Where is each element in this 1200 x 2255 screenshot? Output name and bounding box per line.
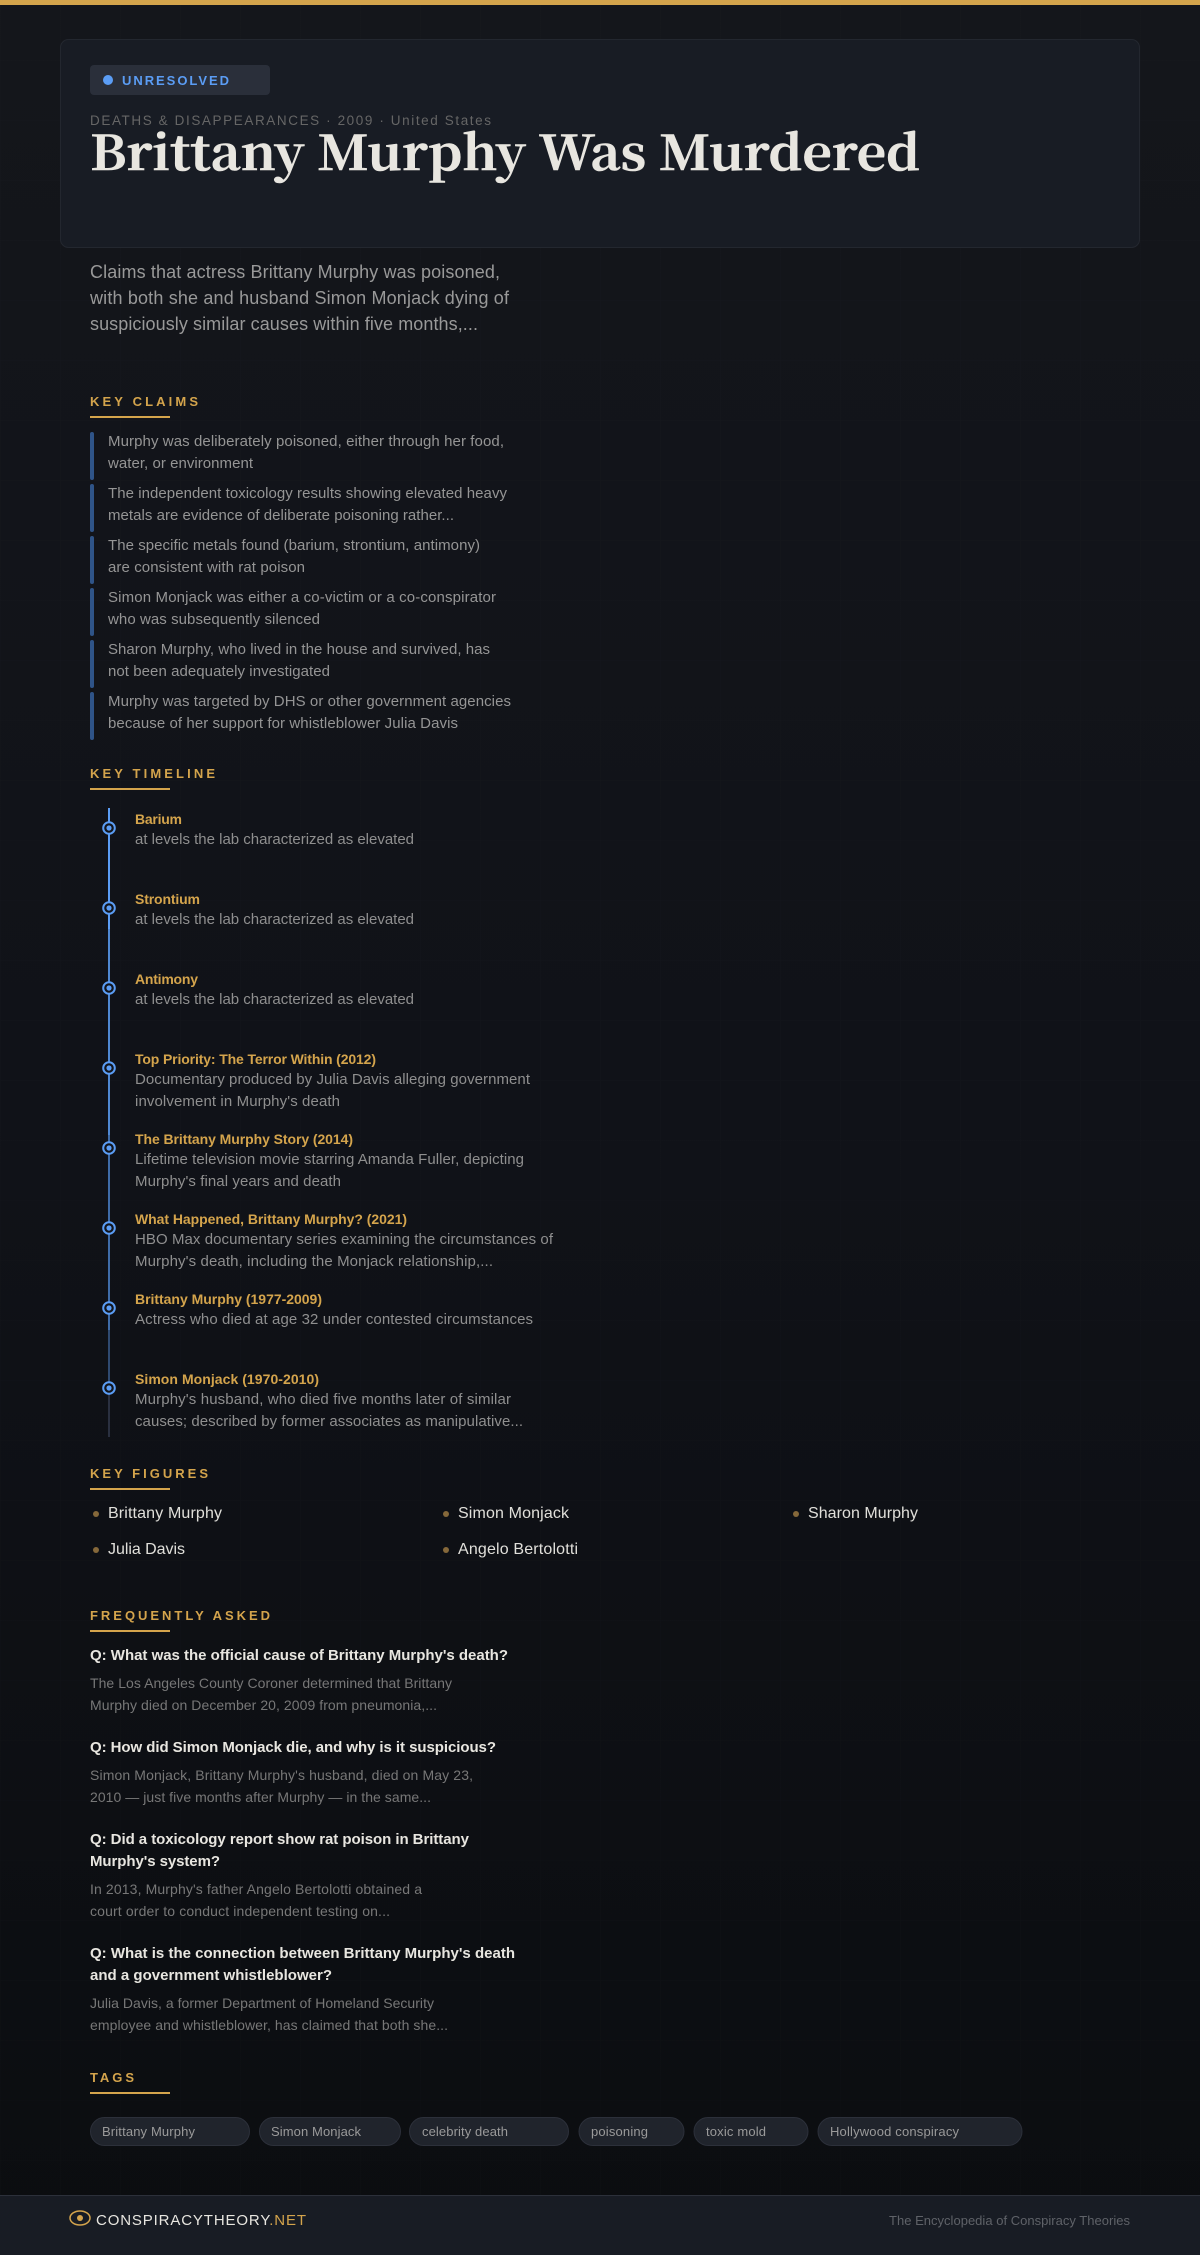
claim 1	[90, 432, 504, 480]
claim 3: The specific metals found (barium, strontium, antimony)	[108, 537, 480, 554]
tag: celebrity death	[410, 2118, 568, 2146]
claim 3	[90, 536, 480, 584]
question 4	[90, 1945, 515, 2033]
summary text	[89, 262, 510, 334]
tag: poisoning: poisoning	[591, 2124, 648, 2139]
question 1: Murphy died on December 20, 2009 from pneumonia,...	[90, 1697, 437, 1713]
question 2: Q: How did Simon Monjack die, and why is it suspicious?	[90, 1739, 496, 1756]
figure: Brittany Murphy: Brittany Murphy	[108, 1505, 222, 1522]
figure: Simon Monjack: Simon Monjack	[458, 1505, 570, 1522]
tag: Simon Monjack: Simon Monjack	[271, 2124, 362, 2139]
tag: Hollywood conspiracy	[818, 2118, 1022, 2146]
claim 1: Murphy was deliberately poisoned, either through her food,	[108, 433, 504, 450]
panel: key claims list	[90, 432, 511, 740]
claim 3: are consistent with rat poison	[108, 559, 305, 576]
tag: celebrity death: celebrity death	[422, 2124, 508, 2139]
event: Strontium: at levels the lab characterized as elevated	[135, 911, 414, 928]
event: Top Priority: Documentary produced by Julia Davis alleging government	[135, 1071, 531, 1088]
tag: Brittany Murphy	[90, 2118, 250, 2146]
heading: key timeline: KEY TIMELINE	[90, 766, 215, 781]
event: Brittany Murphy: Brittany Murphy (1977-2009)	[135, 1291, 322, 1307]
title: Brittany Murphy Was Murdered	[90, 115, 920, 184]
tag: toxic mold	[694, 2118, 808, 2146]
heading: key timeline	[90, 766, 215, 790]
claim 6	[90, 692, 511, 740]
event: The Brittany Murphy Story: Lifetime television movie starring Amanda Fuller, depicting	[135, 1151, 524, 1168]
question 3: Murphy's system?	[90, 1853, 220, 1870]
question 1: The Los Angeles County Coroner determined that Brittany	[90, 1675, 452, 1691]
event: Barium: Barium	[135, 811, 182, 827]
heading: tags	[90, 2070, 170, 2094]
tag: Hollywood conspiracy: Hollywood conspiracy	[830, 2124, 960, 2139]
question 3	[90, 1831, 470, 1919]
question 4: Q: What is the connection between Brittany Murphy's death	[90, 1945, 515, 1962]
claim 2: The independent toxicology results showing elevated heavy	[108, 485, 508, 502]
claim 2	[90, 484, 508, 532]
tag: Brittany Murphy: Brittany Murphy	[102, 2124, 196, 2139]
claim 4	[90, 588, 496, 636]
event: Strontium: Strontium	[135, 891, 200, 907]
event: Brittany Murphy	[103, 1291, 533, 1328]
event: The Brittany Murphy Story: The Brittany Murphy Story (2014)	[135, 1131, 353, 1147]
panel: key figures list	[93, 1505, 918, 1558]
heading: key claims	[90, 394, 198, 418]
category, year and location: DEATHS & DISAPPEARANCES · 2009 · United States	[90, 113, 491, 128]
figure: Angelo Bertolotti: Angelo Bertolotti	[458, 1541, 578, 1558]
summary text: suspiciously similar causes within five months,...	[90, 314, 478, 334]
event: What Happened, Brittany Murphy?: HBO Max documentary series examining the circumstances of	[135, 1231, 554, 1248]
summary text: with both she and husband Simon Monjack dying of	[89, 288, 510, 308]
event: Antimony: Antimony	[135, 971, 198, 987]
question 2	[90, 1739, 496, 1805]
badge: unresolved status: UNRESOLVED	[122, 73, 229, 88]
event: Top Priority: Top Priority: The Terror Within (2012)	[135, 1051, 376, 1067]
icon: eye logo	[70, 2211, 90, 2225]
event: Strontium	[103, 891, 414, 928]
chart: key timeline	[103, 808, 554, 1437]
claim 6: Murphy was targeted by DHS or other government agencies	[108, 693, 511, 710]
claim 2: metals are evidence of deliberate poisoning rather...	[108, 507, 454, 524]
event: Barium	[103, 811, 414, 848]
timeline spine	[108, 808, 110, 1437]
tag: poisoning	[579, 2118, 684, 2146]
claim 4: Simon Monjack was either a co-victim or a co-conspirator	[108, 589, 496, 606]
question 1: Q: What was the official cause of Brittany Murphy's death?	[90, 1647, 508, 1664]
question 4: and a government whistleblower?	[90, 1967, 332, 1984]
heading: tags: TAGS	[90, 2070, 134, 2085]
figure: Julia Davis: Julia Davis	[108, 1541, 185, 1558]
footer tagline: The Encyclopedia of Conspiracy Theories	[889, 2213, 1130, 2228]
panel: frequently asked questions	[90, 1647, 515, 2033]
event: Top Priority: involvement in Murphy's death	[135, 1093, 340, 1110]
claim 1: water, or environment	[107, 455, 254, 472]
summary text: Claims that actress Brittany Murphy was poisoned,	[90, 262, 500, 282]
claim 5: not been adequately investigated	[108, 663, 330, 680]
question 1	[90, 1647, 508, 1713]
event: What Happened, Brittany Murphy?: What Happened, Brittany Murphy? (2021)	[135, 1211, 407, 1227]
event: Simon Monjack: Simon Monjack (1970-2010)	[135, 1371, 319, 1387]
badge: unresolved status	[90, 65, 270, 95]
event: What Happened, Brittany Murphy?: Murphy's death, including the Monjack relationship,...	[135, 1253, 493, 1270]
panel: tags	[90, 2118, 1022, 2146]
wordmark: CONSPIRACYTHEORY.NET	[96, 2212, 306, 2229]
question 3: In 2013, Murphy's father Angelo Bertolotti obtained a	[90, 1881, 422, 1897]
heading: key figures: KEY FIGURES	[90, 1466, 208, 1481]
tag: toxic mold: toxic mold	[706, 2124, 766, 2139]
figure: Sharon Murphy: Sharon Murphy	[808, 1505, 918, 1522]
event: What Happened, Brittany Murphy?	[103, 1211, 554, 1270]
tag: Simon Monjack	[260, 2118, 400, 2146]
heading: frequently asked: FREQUENTLY ASKED	[90, 1608, 270, 1623]
event: Brittany Murphy: Actress who died at age 32 under contested circumstances	[135, 1311, 533, 1328]
question 4: employee and whistleblower, has claimed that both she...	[90, 2017, 448, 2033]
event: Simon Monjack: causes; described by former associates as manipulative...	[135, 1413, 523, 1430]
claim 4: who was subsequently silenced	[107, 611, 320, 628]
question 2: 2010 — just five months after Murphy — in the same...	[90, 1789, 431, 1805]
event: Antimony: at levels the lab characterized as elevated	[135, 991, 414, 1008]
question 3: Q: Did a toxicology report show rat poison in Brittany	[90, 1831, 470, 1848]
claim 5: Sharon Murphy, who lived in the house and survived, has	[108, 641, 490, 658]
event: Top Priority	[103, 1051, 531, 1110]
event: Simon Monjack	[103, 1371, 523, 1430]
claim 6: because of her support for whistleblower Julia Davis	[108, 715, 458, 732]
event: Antimony	[103, 971, 414, 1008]
claim 5	[90, 640, 490, 688]
footer	[0, 2195, 1200, 2255]
event: Simon Monjack: Murphy's husband, who died five months later of similar	[135, 1391, 511, 1408]
event: The Brittany Murphy Story: Murphy's final years and death	[135, 1173, 341, 1190]
panel: header card	[60, 40, 1140, 248]
event: The Brittany Murphy Story	[103, 1131, 524, 1190]
heading: key figures	[90, 1466, 208, 1490]
heading: key claims: KEY CLAIMS	[90, 394, 198, 409]
question 3: court order to conduct independent testing on...	[90, 1903, 390, 1919]
question 2: Simon Monjack, Brittany Murphy's husband, died on May 23,	[90, 1767, 473, 1783]
question 4: Julia Davis, a former Department of Homeland Security	[90, 1995, 434, 2011]
event: Barium: at levels the lab characterized as elevated	[135, 831, 414, 848]
